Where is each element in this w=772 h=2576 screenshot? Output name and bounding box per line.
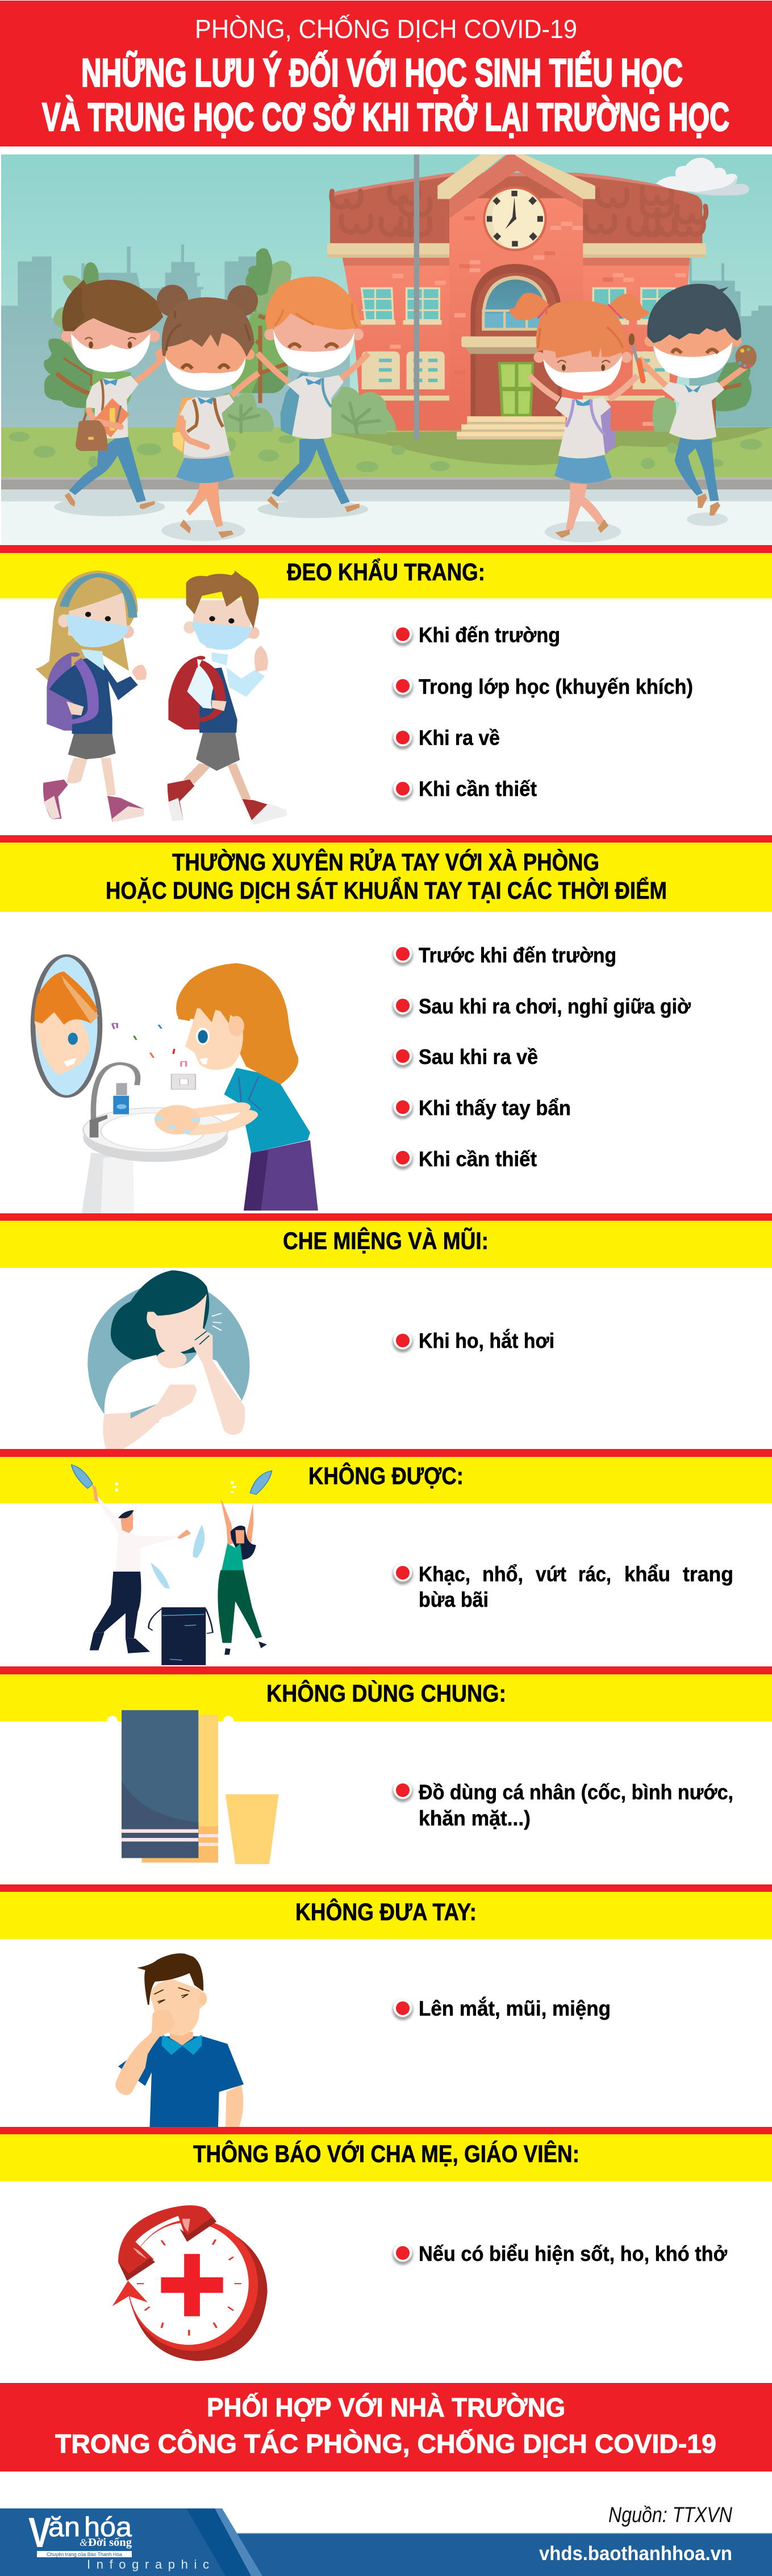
- bullet with wrapped text: [390, 1562, 733, 1611]
- section bar: [0, 545, 772, 598]
- heading: [106, 848, 667, 904]
- logo: Chuyên trang của Báo Thanh Hóa: [47, 2552, 123, 2558]
- heading: KHÔNG DÙNG CHUNG:: [266, 1679, 506, 1707]
- mirror: [33, 956, 100, 1096]
- section 1: wear masks: [0, 545, 772, 824]
- cornice: [327, 243, 449, 258]
- right tree: [652, 397, 677, 432]
- roof: [330, 173, 702, 244]
- section bar: [0, 835, 772, 912]
- bullet list: Khi ra về: [419, 726, 500, 749]
- lawn: [0, 427, 772, 544]
- cup: [226, 1794, 279, 1864]
- switch: [172, 1074, 195, 1090]
- section 7: notify parents and teachers: [0, 2127, 772, 2361]
- source credit: Nguồn: TTXVN: [608, 2503, 732, 2527]
- logo: ăn: [48, 2512, 80, 2543]
- section 2: wash hands: [0, 835, 772, 1213]
- bullet with wrapped text: trang: [683, 1563, 733, 1586]
- website: vhds.baothanhhoa.vn: [539, 2543, 732, 2565]
- section bar: [0, 1884, 772, 1939]
- logo: V: [28, 2509, 51, 2556]
- bullet list: Sau khi ra chơi, nghỉ giữa giờ: [419, 995, 691, 1018]
- clock: [483, 186, 547, 251]
- sink and tap: [82, 1063, 228, 1213]
- icon: emergency phone clock: [112, 2205, 268, 2361]
- logo: Đời sống: [88, 2536, 132, 2549]
- heading: HOẶC DUNG DỊCH SÁT KHUẨN TAY TẠI CÁC THỜI ĐIỂM: [106, 877, 667, 904]
- school building: [327, 153, 772, 471]
- section bar: [0, 1449, 772, 1503]
- bullet: Khi ho, hắt hơi: [419, 1329, 554, 1352]
- footer band: [0, 2508, 772, 2576]
- girl: [35, 571, 147, 822]
- woman: [218, 1499, 267, 1654]
- section 5: do not share: [0, 1666, 772, 1864]
- illustration: towels and cup: [107, 1710, 279, 1864]
- boy: [168, 570, 286, 824]
- bullet with wrapped text: rác,: [578, 1563, 611, 1586]
- bullet: Lên mắt, mũi, miệng: [419, 1996, 611, 2020]
- hero illustration: pupils walking to school: [0, 153, 772, 544]
- section 3: cover mouth and nose: [0, 1213, 772, 1449]
- music notes: [112, 1024, 186, 1067]
- pupil five: boy with palette: [629, 284, 757, 526]
- heading: ĐEO KHẨU TRANG:: [287, 558, 485, 586]
- heading: THƯỜNG XUYÊN RỬA TAY VỚI XÀ PHÒNG: [172, 848, 599, 876]
- city skyline: [0, 245, 350, 427]
- central tower: [449, 198, 583, 401]
- illustration: two pupils with masks: [35, 570, 286, 824]
- illustration: boy touching face: [115, 1953, 244, 2127]
- header banner: [0, 1, 772, 146]
- pupil three: boy with orange hair: [257, 277, 368, 518]
- closing red banner: PHỐI HỢP VỚI NHÀ TRƯỜNG: [207, 2393, 565, 2422]
- bullet list: Sau khi ra về: [419, 1045, 538, 1069]
- illustration: people throwing masks into bin: [72, 1465, 272, 1665]
- logo: &: [80, 2537, 87, 2548]
- grass tufts: [391, 439, 762, 471]
- gable: [437, 154, 595, 199]
- lawn shadow: [332, 427, 772, 465]
- grass tufts left: [9, 432, 378, 472]
- bullet with wrapped text: Đồ dùng cá nhân (cốc, bình nước,: [419, 1781, 733, 1804]
- trash bin: [149, 1607, 212, 1665]
- heading: KHÔNG ĐƯỢC:: [308, 1462, 464, 1490]
- small bush at steps side: [386, 409, 397, 430]
- bullet list: [390, 623, 693, 803]
- bullet with wrapped text: vứt: [536, 1563, 566, 1586]
- bullet: [390, 1329, 554, 1355]
- bullet list: Khi đến trường: [419, 623, 560, 647]
- bullet with wrapped text: khăn mặt...): [419, 1807, 531, 1830]
- entrance: [457, 264, 566, 439]
- bullet list: Khi thấy tay bẩn: [419, 1096, 571, 1120]
- girl: [154, 963, 318, 1210]
- section bar: [0, 1666, 772, 1721]
- illustration: girl washing hands: [33, 956, 318, 1213]
- bullet: Nếu có biểu hiện sốt, ho, khó thở: [419, 2242, 728, 2265]
- masks: [72, 1465, 272, 1589]
- flag pole: [414, 153, 419, 440]
- heading: THÔNG BÁO VỚI CHA MẸ, GIÁO VIÊN:: [193, 2140, 579, 2168]
- right bush behind pupil three: [331, 387, 386, 434]
- bullet list: [390, 943, 691, 1172]
- bullet with wrapped text: nhổ,: [482, 1563, 523, 1586]
- bullet list: Trong lớp học (khuyến khích): [419, 675, 693, 698]
- logo: [28, 2509, 209, 2571]
- lower windows: [362, 351, 670, 389]
- section bar: [0, 1213, 772, 1268]
- section 4: must not: [0, 1449, 772, 1665]
- walls: [343, 258, 690, 430]
- bullet with wrapped text: bừa bãi: [419, 1588, 489, 1611]
- distant tower right: [689, 258, 772, 427]
- bullet with wrapped text: khẩu: [624, 1563, 670, 1586]
- bullet list: Trước khi đến trường: [419, 944, 616, 967]
- heading: KHÔNG ĐƯA TAY:: [295, 1898, 477, 1926]
- logo: Infographic: [87, 2557, 209, 2571]
- trees and bushes: [44, 248, 291, 432]
- closing red banner: TRONG CÔNG TÁC PHÒNG, CHỐNG DỊCH COVID-19: [55, 2429, 716, 2458]
- brick details: [390, 222, 686, 426]
- orange towel: [142, 1715, 218, 1862]
- illustration: woman coughing: [87, 1270, 249, 1449]
- closing red banner: [0, 2383, 772, 2472]
- heading: CHE MIỆNG VÀ MŨI:: [283, 1227, 489, 1255]
- bullet list: Khi cần thiết: [419, 1147, 537, 1171]
- pupil two: girl with hair buns: [155, 284, 258, 541]
- cloud: [656, 158, 737, 192]
- upper windows: [362, 288, 674, 320]
- bullet with wrapped text: Khạc,: [419, 1563, 470, 1586]
- bullet with wrapped text: [390, 1779, 733, 1830]
- header kicker: PHÒNG, CHỐNG DỊCH COVID-19: [195, 14, 577, 44]
- logo: hóa: [84, 2512, 132, 2543]
- blue towel: [122, 1710, 198, 1858]
- man: [90, 1484, 191, 1653]
- section bar: [0, 2127, 772, 2181]
- bullet list: Khi cần thiết: [419, 777, 537, 801]
- pupil four: girl with pigtails: [509, 293, 650, 542]
- pupil one: boy with shoulder bag: [54, 279, 165, 516]
- section 6: do not touch: [0, 1884, 772, 2127]
